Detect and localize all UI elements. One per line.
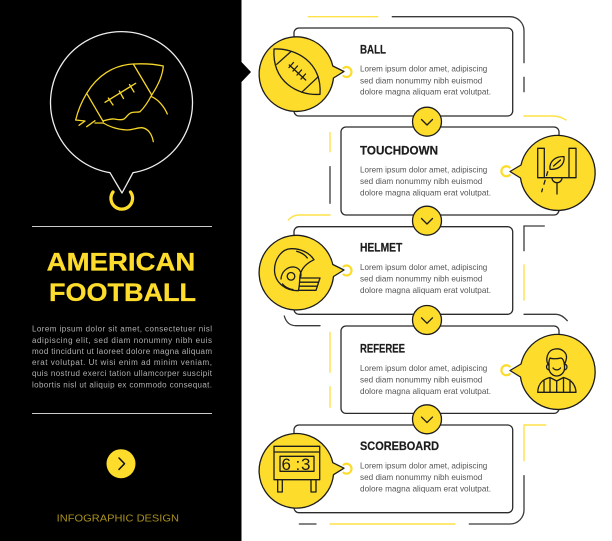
- chevron button 4: [412, 405, 442, 434]
- text block: helmet: Lorem ipsum dolor amet, adipiscing: [360, 263, 487, 272]
- panel: referee: [341, 326, 595, 413]
- panel: scoreboard: [259, 425, 513, 513]
- heading: scoreboard: SCOREBOARD: [360, 440, 439, 453]
- text block: referee: sed diam nonummy nibh euismod: [360, 375, 482, 384]
- icon: speech bubble with football: [50, 32, 192, 193]
- text block: scoreboard: Lorem ipsum dolor amet, adipiscing: [360, 461, 487, 470]
- text block: intro paragraph: quis nostrud exerci tation ullamcorper suscipit: [32, 369, 213, 378]
- text block: ball: Lorem ipsum dolor amet, adipiscing: [360, 65, 487, 74]
- chevron button 3: [412, 306, 442, 334]
- icon: scoreboard bubble: [259, 434, 352, 508]
- icon: goal post bubble: [501, 135, 595, 210]
- text block: intro paragraph: [32, 325, 213, 389]
- text block: helmet: sed diam nonummy nibh euismod: [360, 275, 482, 284]
- icon: yellow ring: [111, 192, 133, 209]
- heading: touchdown: TOUCHDOWN: [360, 144, 438, 157]
- panel: left sidebar: [0, 0, 251, 541]
- text block: ball: dolore magna aliquam erat volutpat.: [360, 88, 491, 97]
- text block: scoreboard: dolore magna aliquam erat volutpat.: [360, 484, 491, 494]
- text block: helmet: [360, 263, 491, 295]
- heading: referee: REFEREE: [360, 343, 405, 356]
- text block: touchdown: Lorem ipsum dolor amet, adipiscing: [360, 165, 487, 174]
- text block: intro paragraph: adipiscing elit, sed diam nonummy nibh euis: [32, 336, 212, 345]
- icon: football bubble: [259, 37, 352, 111]
- text block: intro paragraph: erat volutpat. Ut wisi enim ad minim veniam,: [32, 358, 212, 367]
- icon: referee bubble: [501, 334, 595, 409]
- text block: ball: sed diam nonummy nibh euismod: [360, 76, 482, 85]
- text block: intro paragraph: lobortis nisl ut aliquip ex commodo consequat.: [32, 380, 212, 389]
- text block: referee: [360, 364, 491, 396]
- title: FOOTBALL: [49, 279, 196, 307]
- text block: intro paragraph: mod tincidunt ut laoreet dolore magna aliquam: [32, 347, 212, 356]
- text block: scoreboard: [360, 461, 491, 494]
- text block: touchdown: sed diam nonummy nibh euismod: [360, 177, 482, 186]
- title: [47, 249, 196, 307]
- divider bottom: [32, 413, 212, 414]
- decorative connector lines: [284, 17, 567, 524]
- text block: scoreboard: sed diam nonummy nibh euismod: [360, 473, 482, 482]
- text block: touchdown: [360, 165, 491, 197]
- text block: intro paragraph: Lorem ipsum dolor sit amet, consectetuer nisl: [32, 325, 212, 334]
- title: AMERICAN: [47, 249, 195, 277]
- panel: helmet: [259, 227, 513, 314]
- text block: touchdown: dolore magna aliquam erat volutpat.: [360, 188, 491, 197]
- text block: helmet: dolore magna aliquam erat volutpat.: [360, 286, 491, 295]
- icon: scoreboard bubble: 6:3: [282, 455, 310, 474]
- panel: touchdown: [341, 127, 595, 215]
- text block: referee: Lorem ipsum dolor amet, adipiscing: [360, 364, 487, 373]
- heading: ball: BALL: [360, 43, 386, 56]
- text block: ball: [360, 65, 491, 97]
- icon: helmet bubble: [259, 235, 352, 310]
- heading: helmet: HELMET: [360, 242, 402, 255]
- footer label: INFOGRAPHIC DESIGN: [57, 513, 179, 525]
- text block: referee: dolore magna aliquam erat volutpat.: [360, 387, 491, 396]
- button: next arrow: [106, 449, 136, 478]
- chevron button 2: [412, 206, 442, 235]
- chevron button 1: [412, 107, 442, 136]
- panel: ball: [259, 28, 513, 116]
- divider top: [32, 226, 212, 227]
